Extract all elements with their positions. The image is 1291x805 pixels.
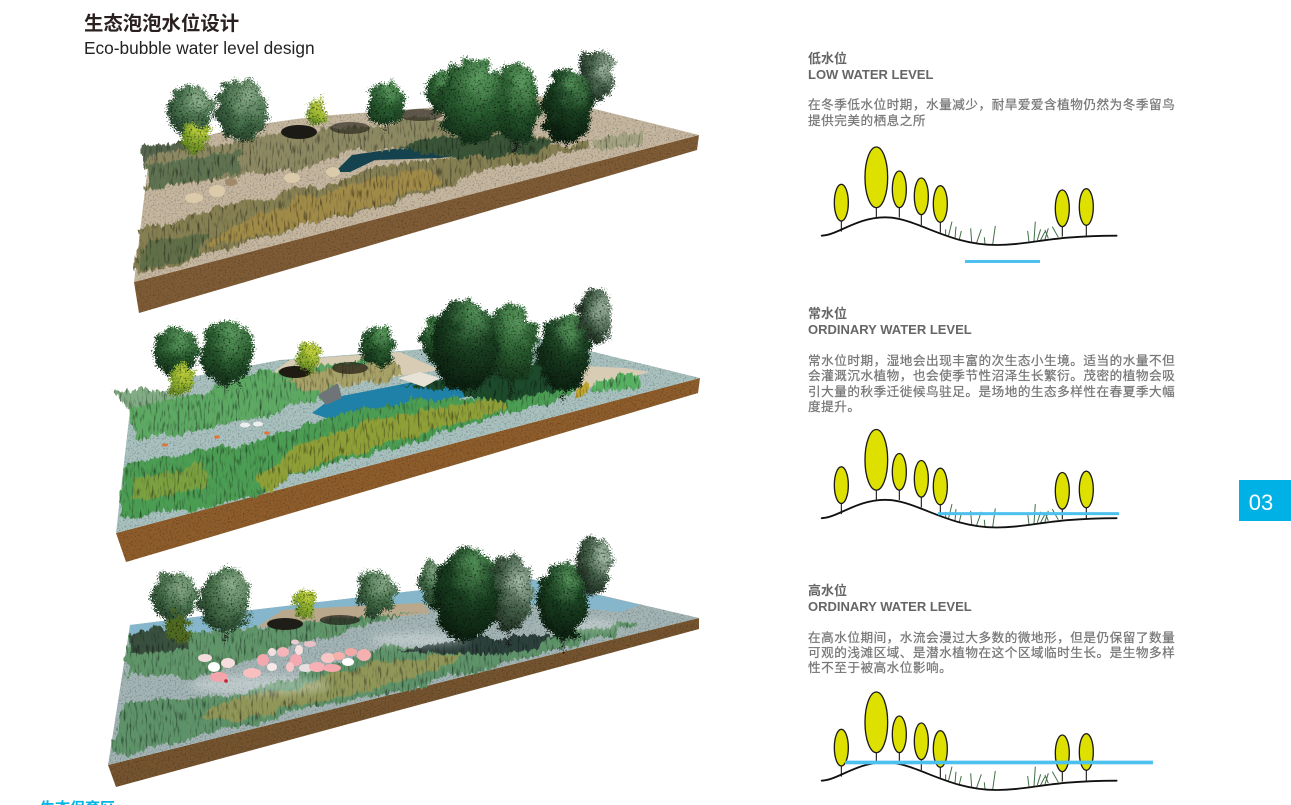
page number badge [1239, 480, 1291, 521]
text: high water level: 高水位 [808, 583, 847, 598]
text: high water level: 在高水位期间，水流会漫过大多数的微地形，但是仍保留了数量 [808, 630, 1175, 645]
flamingos [198, 640, 371, 683]
diagram: ordinary water section [822, 429, 1119, 527]
tree shadows [279, 362, 368, 378]
text: ordinary water level [808, 306, 1175, 414]
page number badge: 03 [1249, 490, 1273, 515]
tree shadows [281, 109, 442, 139]
flooded surface [108, 578, 699, 765]
wetland grasses [112, 352, 640, 519]
panel: low water level terrain model [134, 47, 699, 313]
trees [154, 289, 612, 402]
water level line [965, 260, 1040, 263]
text: high water level: 可观的浅滩区域、是潜水植物在这个区域临时生长。是生物多样 [808, 645, 1175, 660]
tree shadows [267, 615, 360, 630]
water level line [938, 512, 1119, 515]
wetland grasses [112, 613, 636, 756]
river water [312, 382, 493, 423]
text: low water level: 提供完美的栖息之所 [808, 113, 926, 128]
diagram: high water section [822, 692, 1153, 790]
wetland grasses [135, 118, 640, 273]
ground surface [134, 95, 699, 282]
subtitle: Eco-bubble water level design [84, 38, 315, 58]
diagram: low water section [822, 147, 1117, 263]
text: low water level [808, 51, 1175, 128]
text: high water level: 性不至于被高水位影响。 [808, 660, 952, 675]
text: ordinary water level: 会灌溉沉水植物，也会使季节性沼泽生长繁衍。茂密的植物会吸 [808, 368, 1175, 383]
soil side [116, 378, 700, 562]
water pool [335, 140, 505, 172]
text: ordinary water level: ORDINARY WATER LEVEL [808, 322, 972, 337]
trees [167, 47, 615, 152]
panel: ordinary water level terrain model [112, 289, 700, 562]
sand bank [257, 603, 430, 627]
text: high water level: ORDINARY WATER LEVEL [808, 599, 972, 614]
text: ordinary water level: 常水位时期，湿地会出现丰富的次生态小生境。适当的水量不但 [808, 353, 1175, 368]
water level line [845, 761, 1153, 764]
birds [162, 372, 440, 447]
rocks [185, 167, 340, 203]
text: ordinary water level: 常水位 [808, 306, 847, 321]
sand banks [255, 352, 650, 392]
ground surface [116, 337, 700, 533]
title: 生态泡泡水位设计 [84, 12, 239, 35]
soil side [108, 618, 699, 787]
text: high water level [808, 583, 1175, 675]
panel: high water level terrain model [108, 537, 699, 787]
text: ordinary water level: 度提升。 [808, 399, 860, 414]
soil side [134, 135, 699, 313]
text: low water level: 低水位 [808, 51, 847, 66]
background water [130, 578, 640, 640]
text: low water level: LOW WATER LEVEL [808, 67, 933, 82]
text: ordinary water level: 引大量的秋季迁徙候鸟驻足。是场地的生态多样性在春夏季大幅 [808, 384, 1175, 399]
trees [151, 537, 612, 652]
text: low water level: 在冬季低水位时期，水量减少，耐旱爱爱含植物仍然为冬季留鸟 [808, 97, 1175, 112]
mist [190, 619, 620, 695]
